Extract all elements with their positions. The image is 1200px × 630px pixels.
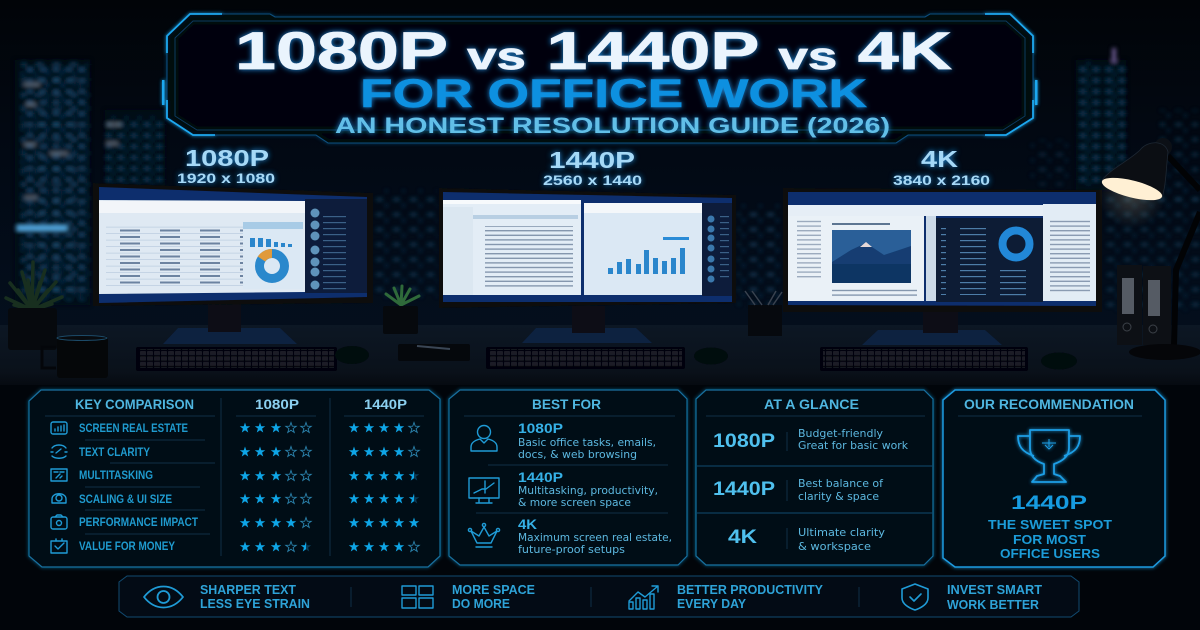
best for: 1080P: docs, & web browsing [518,448,637,461]
icon: trophy [1018,430,1080,482]
glance row: 1440P: clarity & space [798,490,879,503]
row labels: MULTITASKING [79,470,153,482]
best for: 1440P [518,469,658,509]
monitor label: 1080P: 1080P [185,145,269,171]
benefit: more space: MORE SPACE [452,583,535,597]
row labels: TEXT CLARITY [79,447,150,459]
best for: 1440P: Multitasking, productivity, [518,484,658,497]
best for: 1080P: 1080P [518,420,563,436]
panel: our recommendation [943,390,1165,567]
best for: 4K: 4K [518,516,537,532]
benefit: invest smart: INVEST SMART [947,583,1042,597]
monitor: 4K with image and dashboard [783,188,1102,371]
key comparison headers: 1440P [364,397,407,412]
benefit: better productivity [629,583,824,611]
icon: user [471,426,497,451]
best for: 1440P: & more screen space [518,496,631,509]
recommendation result: THE SWEET SPOT [988,517,1112,532]
benefit: sharper text: SHARPER TEXT [200,583,296,597]
glance row: 1080P [713,427,909,452]
monitor label: 1080P: 1920 x 1080 [177,170,275,186]
best for: 1080P [518,420,656,461]
best for: 4K: Maximum screen real estate, [518,531,672,544]
monitor label: 1080P [177,145,275,186]
monitor label: 1440P: 1440P [549,147,635,173]
icon: crown [468,523,500,547]
recommendation result: FOR MOST [1013,532,1086,547]
binders [1117,265,1171,345]
benefit: more space: DO MORE [452,597,510,611]
glance row: 1440P [713,477,884,503]
title text: AN HONEST RESOLUTION GUIDE (2026) [335,113,890,138]
ratings: 1080P [240,422,311,551]
best for: 1080P: Basic office tasks, emails, [518,436,656,449]
recommendation result [988,493,1112,561]
at a glance heading: AT A GLANCE [764,397,859,412]
potted plant centre [383,286,419,334]
pencil cup [745,291,782,336]
monitor: 1440P with document and chart [439,188,736,369]
recommendation result: 1440P [1011,493,1087,514]
desk surface [0,325,1200,392]
row labels: VALUE FOR MONEY [79,541,175,553]
row labels: SCREEN REAL ESTATE [79,423,188,435]
recommendation heading: OUR RECOMMENDATION [964,397,1134,412]
panel: at a glance [696,390,933,565]
title text [235,22,952,138]
row labels: SCALING & UI SIZE [79,494,172,506]
benefit: better productivity: BETTER PRODUCTIVITY [677,583,824,597]
title text: 1080P vs 1440P vs 4K [235,22,952,81]
desk lamp [1098,138,1200,360]
row icons [51,422,67,553]
panel: best for [449,390,687,565]
key comparison headers: 1080P [255,397,299,412]
benefit: sharper text: LESS EYE STRAIN [200,597,310,611]
benefit: more space [402,583,535,611]
glance row: 1440P: Best balance of [798,477,884,490]
monitor: 1080P with spreadsheet [93,183,373,371]
best for: 4K [518,516,672,556]
row labels: PERFORMANCE IMPACT [79,517,198,529]
glance row: 1080P: 1080P [713,431,775,452]
glance row: 1080P: Budget-friendly [798,427,883,440]
notebook and pen [398,344,470,361]
potted plant left [6,262,62,350]
monitor label: 4K [893,146,990,188]
icon: monitor [469,478,499,503]
benefit: sharper text [144,583,310,611]
monitor label: 1440P: 2560 x 1440 [543,172,642,188]
benefit: invest smart: WORK BETTER [947,598,1039,612]
monitor label: 1440P [543,147,642,188]
glance row: 4K: 4K [728,527,757,548]
best for heading: BEST FOR [532,397,601,412]
key comparison headers: KEY COMPARISON [75,397,194,412]
recommendation result: OFFICE USERS [1000,546,1100,561]
panel: key comparison [29,390,440,567]
monitor label: 4K: 4K [921,146,958,172]
glance row: 4K [728,526,885,553]
title frame [162,14,1038,143]
best for: 1440P: 1440P [518,469,563,485]
glance row: 4K: & workspace [798,540,871,553]
coffee mug [42,336,108,378]
row labels [79,423,198,553]
key comparison headers [75,397,407,412]
benefits bar [119,576,1079,617]
ratings: 1440P [349,422,419,551]
best for: 4K: future-proof setups [518,543,625,556]
monitor label: 4K: 3840 x 2160 [893,172,990,188]
title text: FOR OFFICE WORK [360,72,867,116]
glance row: 4K: Ultimate clarity [798,526,885,539]
lower dark band [0,385,1200,630]
glance row: 1080P: Great for basic work [798,439,909,452]
benefit: better productivity: EVERY DAY [677,597,747,611]
benefit: invest smart [902,583,1042,612]
glance row: 1440P: 1440P [713,479,775,500]
